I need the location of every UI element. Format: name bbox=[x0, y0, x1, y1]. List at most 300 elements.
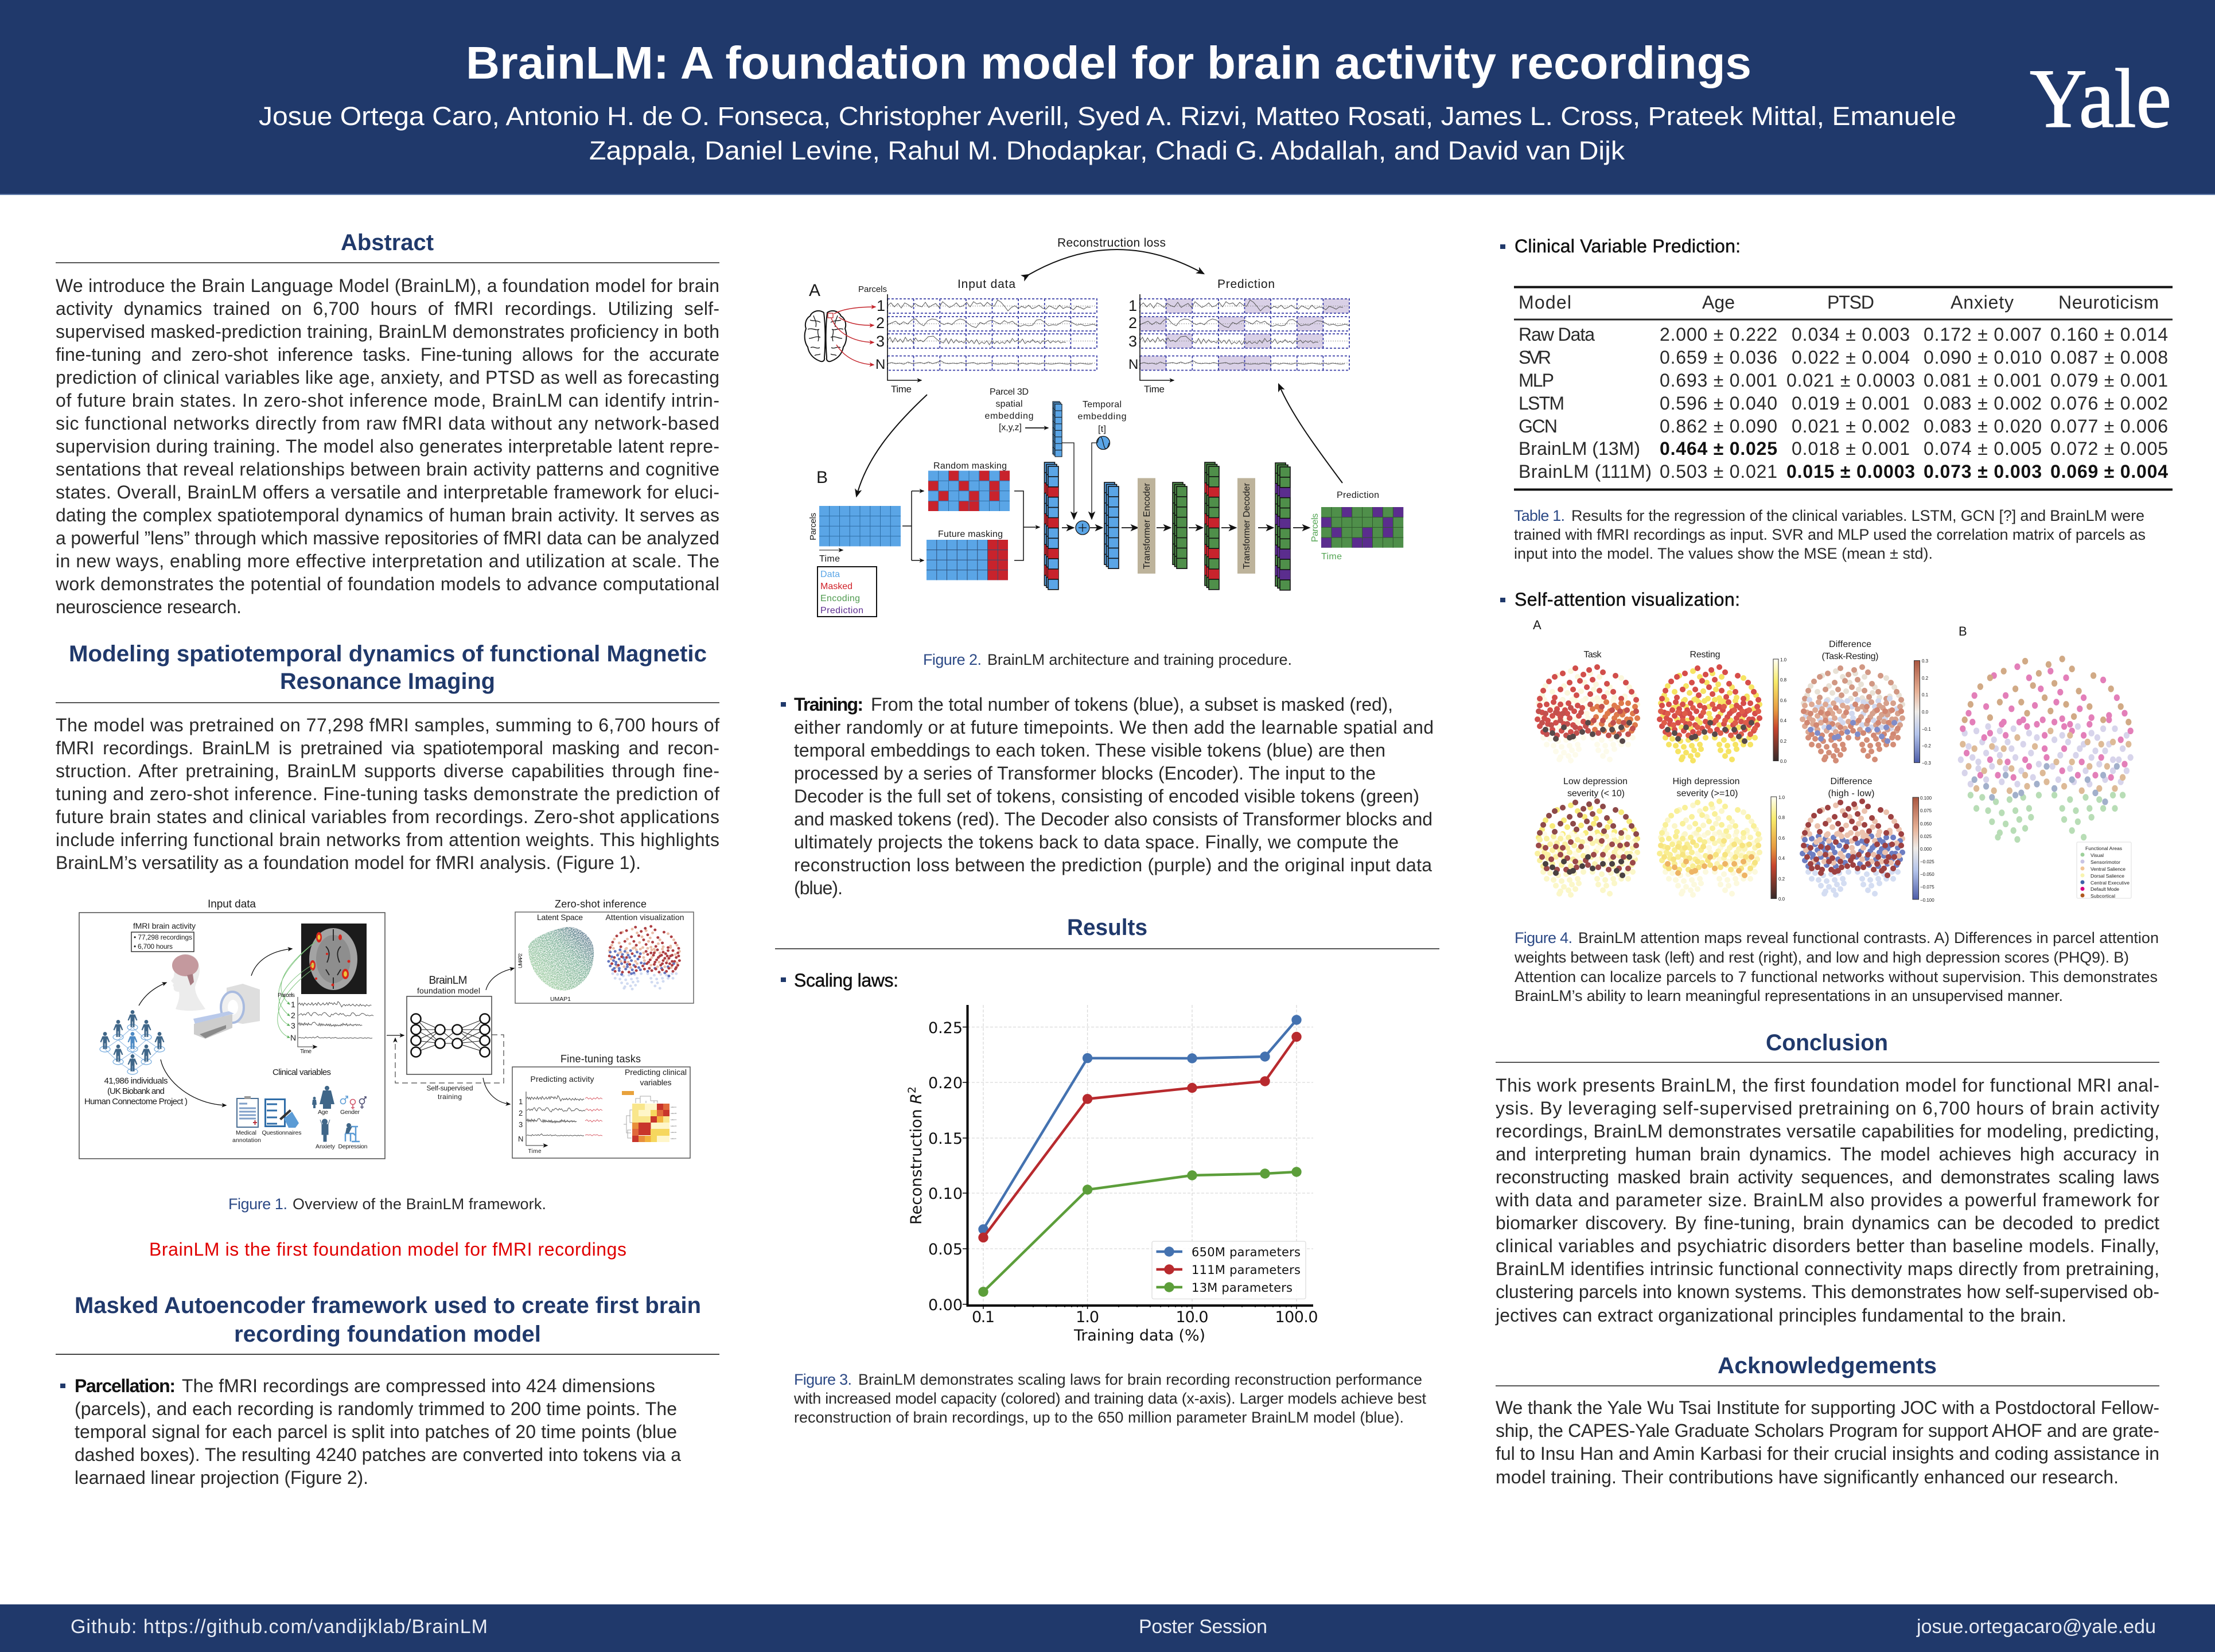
parcellation bullet: learnaed linear projection (Figure 2). bbox=[75, 1467, 368, 1488]
table header: Age bbox=[1702, 292, 1735, 313]
title: BrainLM: A foundation model for brain activity recordings bbox=[466, 37, 1751, 88]
training bullet: and masked tokens (red). The Decoder also consists of Transformer blocks and bbox=[794, 809, 1432, 829]
brain plot: task bbox=[1537, 667, 1637, 761]
colorbar: depression bbox=[1771, 795, 1785, 902]
heading: masked autoencoder bbox=[75, 1293, 701, 1347]
embeddings: [x,y,z] bbox=[999, 423, 1022, 433]
table rows: 0.077 ± 0.006 bbox=[2050, 416, 2168, 437]
modeling text: include inferring functional brain networks from attention weights. This highlights bbox=[56, 829, 719, 850]
plot titles: Difference bbox=[1829, 640, 1871, 649]
clustered heatmap: Label B bbox=[671, 1112, 676, 1115]
colorbar: task and resting: 1.0 bbox=[1780, 657, 1787, 663]
abstract text: We introduce the Brain Language Model (BrainLM), a foundation model for brain bbox=[56, 275, 719, 296]
parcellation bullet bbox=[60, 1376, 681, 1488]
table rows: SVR bbox=[1519, 347, 1551, 368]
modeling text: struction. After pretraining, BrainLM supports diverse capabilities through fine- bbox=[56, 761, 719, 781]
BrainLM foundation model: training bbox=[438, 1093, 462, 1101]
parcellation bullet: dashed boxes). The resulting 4240 patches are converted into tokens via a bbox=[75, 1444, 681, 1465]
axes bbox=[906, 1005, 1318, 1345]
modeling text: The model was pretrained on 77,298 fMRI samples, summing to 6,700 hours of bbox=[56, 715, 719, 735]
clinical variables bbox=[232, 1067, 368, 1150]
figure 4 caption: Figure 4. bbox=[1515, 929, 1572, 946]
heading: abstract: Abstract bbox=[341, 230, 434, 255]
zero-shot inference panel: UMAP1 bbox=[550, 996, 571, 1003]
table rows: 0.019 ± 0.001 bbox=[1792, 393, 1910, 414]
acknowledgements text: model training. Their contributions have significantly enhanced our research. bbox=[1496, 1467, 2119, 1487]
table rows: 0.659 ± 0.036 bbox=[1660, 347, 1777, 368]
panel A: 3 bbox=[876, 333, 885, 350]
figure 3 caption: with increased model capacity (colored) and training data (x-axis). Larger models achieve best bbox=[793, 1390, 1426, 1407]
table rows: 0.073 ± 0.003 bbox=[1924, 461, 2042, 482]
table rows: BrainLM (13M) bbox=[1519, 438, 1640, 459]
table rows: 0.083 ± 0.002 bbox=[1924, 393, 2042, 414]
axes: 2 bbox=[906, 1086, 918, 1093]
modeling text: tuning and zero-shot inference. Fine-tuning tasks demonstrate the prediction of bbox=[56, 784, 719, 804]
axes: Training data (%) bbox=[1073, 1327, 1205, 1345]
icon: age gender anxiety depression bbox=[312, 1086, 366, 1141]
modeling text: BrainLM’s versatility as a foundation model for fMRI analysis. (Figure 1). bbox=[56, 852, 641, 873]
clinical variables: Anxiety bbox=[316, 1143, 336, 1150]
table 1 caption: Results for the regression of the clinical variables. LSTM, GCN [?] and BrainLM were bbox=[1571, 507, 2144, 524]
conclusion text: BrainLM identifies intrinsic functional connectivity maps directly from pretraining, bbox=[1496, 1259, 2159, 1279]
colorbar: depression: 0.8 bbox=[1778, 815, 1785, 820]
clustered heatmap bbox=[622, 1091, 677, 1142]
random masking grid bbox=[928, 461, 1010, 511]
fine-tuning tasks panel: Predicting activity bbox=[530, 1074, 594, 1084]
prediction signals: 2 bbox=[1128, 314, 1137, 332]
series: 650M bbox=[978, 1015, 1302, 1234]
clinical variables: Depression bbox=[338, 1143, 368, 1150]
abstract text: dating the complex spatiotemporal dynamics of human brain activity. It serves as bbox=[56, 505, 719, 525]
footer bar: Github: https://github.com/vandijklab/BrainLM bbox=[71, 1616, 488, 1638]
transformer encoder: Transformer Encoder bbox=[1142, 482, 1152, 569]
participants label: Human Connectome Project ) bbox=[84, 1097, 188, 1106]
BrainLM foundation model bbox=[387, 968, 514, 1104]
colorbar: high minus low: 0.075 bbox=[1920, 808, 1932, 813]
legend: token colors bbox=[818, 567, 877, 617]
footer bar: Poster Session bbox=[1139, 1616, 1267, 1638]
panel A: 2 bbox=[876, 314, 885, 332]
prediction signals bbox=[1128, 294, 1349, 395]
prediction signals: N bbox=[1128, 357, 1138, 372]
table 1 caption: Table 1. bbox=[1514, 507, 1565, 524]
authors: Josue Ortega Caro, Antonio H. de O. Fonseca, Christopher Averill, Syed A. Rizvi, Matteo Rosati, James L. Cross, Prateek Mittal, Emanuele bbox=[259, 102, 1956, 131]
plot titles: (Task-Resting) bbox=[1822, 652, 1878, 661]
table rows: 0.464 ± 0.025 bbox=[1660, 438, 1777, 459]
icon: medical annotation bbox=[237, 1096, 258, 1127]
transformer decoder bbox=[1237, 478, 1255, 574]
icon: participant network bbox=[100, 1010, 165, 1074]
footer bar bbox=[0, 1604, 2215, 1652]
prediction grid: Prediction bbox=[1337, 490, 1379, 500]
clinical variables: Medical bbox=[236, 1129, 256, 1136]
figure 4 caption: weights between task (left) and rest (right), and low and high depression scores (PHQ9). B) bbox=[1514, 949, 2129, 966]
colorbar: task minus resting bbox=[1914, 659, 1931, 766]
clinical variable prediction label: Clinical Variable Prediction: bbox=[1515, 236, 1741, 256]
clinical variables: Age bbox=[318, 1109, 328, 1116]
acknowledgements text: ship, the CAPES-Yale Graduate Scholars Program for support AHOF and are grate- bbox=[1496, 1420, 2159, 1441]
modeling text: fMRI recordings. BrainLM is pretrained via spatiotemporal masking and recon- bbox=[56, 738, 719, 758]
colorbar: high minus low: −0.100 bbox=[1920, 898, 1934, 903]
legend: functional areas bbox=[2077, 842, 2131, 899]
legend: functional areas: Visual bbox=[2091, 852, 2104, 858]
figure 1 caption: Overview of the BrainLM framework. bbox=[293, 1195, 546, 1213]
table rows: 0.503 ± 0.021 bbox=[1660, 461, 1777, 482]
abstract text: states. Overall, BrainLM offers a versatile and interpretable framework for eluci- bbox=[56, 482, 719, 502]
table rows: 0.018 ± 0.001 bbox=[1792, 438, 1910, 459]
legend: token colors: Masked bbox=[820, 582, 852, 591]
figure 3 caption: Figure 3. bbox=[794, 1371, 852, 1388]
chart legend: 13M parameters bbox=[1192, 1281, 1293, 1295]
brain plot: resting bbox=[1660, 667, 1759, 761]
abstract text: fine-tuning and zero-shot inference tasks. Fine-tuning allows for the accurate bbox=[56, 344, 719, 365]
table rows: 0.090 ± 0.010 bbox=[1924, 347, 2042, 368]
zero-shot inference panel bbox=[515, 898, 694, 1003]
table rows: 0.021 ± 0.002 bbox=[1792, 416, 1910, 437]
conclusion text: and interpreting human brain dynamics. The model achieves high accuracy in bbox=[1496, 1144, 2159, 1164]
abstract text: prediction of clinical variables like age, anxiety, and PTSD as well as forecasting bbox=[56, 367, 719, 388]
table 1 caption bbox=[1514, 507, 2146, 562]
acknowledgements text: ful to Insu Han and Amin Karbasi for their crucial insights and coding assistance in bbox=[1496, 1443, 2159, 1464]
legend: functional areas: Central Executive bbox=[2091, 880, 2130, 886]
axes: 0.10 bbox=[928, 1185, 963, 1203]
table rows: 0.034 ± 0.003 bbox=[1792, 324, 1910, 345]
panel: conclusion bbox=[1495, 1030, 2159, 1326]
table rows: 0.160 ± 0.014 bbox=[2050, 324, 2168, 345]
table rows: MLP bbox=[1519, 370, 1554, 391]
clustered heatmap: Label F bbox=[671, 1137, 676, 1140]
clustered heatmap: Label A bbox=[671, 1106, 676, 1108]
panel A: A bbox=[809, 281, 820, 300]
abstract text: neuroscience research. bbox=[56, 597, 242, 617]
embeddings: [t] bbox=[1098, 424, 1106, 434]
modeling text bbox=[56, 715, 719, 873]
add embeddings bbox=[1062, 521, 1102, 535]
colorbar: high minus low bbox=[1913, 796, 1934, 903]
axes: Reconstruction R bbox=[908, 1093, 925, 1225]
colorbar: high minus low: 0.050 bbox=[1920, 821, 1932, 827]
table rows: 0.076 ± 0.002 bbox=[2050, 393, 2168, 414]
panel A: 1 bbox=[877, 297, 885, 314]
zero-shot inference panel: Zero-shot inference bbox=[555, 898, 647, 910]
heading: conclusion: Conclusion bbox=[1766, 1030, 1888, 1055]
axes: 0.15 bbox=[928, 1130, 963, 1148]
abstract text bbox=[55, 275, 719, 617]
parcel time series: 1 bbox=[291, 1000, 295, 1009]
table 1 caption: input into the model. The values show the MSE (mean ± std). bbox=[1514, 545, 1933, 562]
clinical variables: Gender bbox=[340, 1109, 360, 1116]
prediction grid: Parcels bbox=[1310, 513, 1320, 542]
figure 4: attention maps: A bbox=[1533, 618, 1541, 632]
colorbar: high minus low: −0.025 bbox=[1920, 859, 1934, 864]
fine-tuning tasks panel: Predicting clinical bbox=[625, 1067, 687, 1077]
authors bbox=[259, 102, 1956, 165]
plot titles: severity (>=10) bbox=[1676, 789, 1738, 798]
input data panel: Input data bbox=[208, 898, 256, 910]
clustered heatmap: Label E bbox=[671, 1131, 676, 1133]
axes: 0.00 bbox=[928, 1296, 963, 1314]
colorbar: high minus low: 0.000 bbox=[1920, 847, 1932, 852]
embeddings: embedding bbox=[984, 411, 1034, 421]
panel B: B bbox=[816, 468, 828, 487]
figure 4: attention maps bbox=[1533, 618, 2131, 903]
table rows: 2.000 ± 0.222 bbox=[1660, 324, 1777, 345]
prediction signals: 3 bbox=[1128, 333, 1137, 350]
panel: acknowledgements bbox=[1496, 1353, 2159, 1487]
axes: 10.0 bbox=[1176, 1308, 1208, 1326]
transformer decoder: Transformer Decoder bbox=[1242, 482, 1252, 569]
heading: masked autoencoder: Masked Autoencoder framework used to create first brain bbox=[75, 1293, 701, 1318]
clustered heatmap: Label D bbox=[671, 1125, 677, 1127]
heading: modeling: Resonance Imaging bbox=[280, 669, 495, 694]
fine-tuning tasks panel bbox=[512, 1053, 690, 1158]
fine-tuning tasks panel: variables bbox=[640, 1078, 671, 1087]
plot titles: severity (< 10) bbox=[1567, 789, 1625, 798]
heading: modeling bbox=[69, 641, 707, 694]
figure 1: overview of the BrainLM framework bbox=[79, 898, 694, 1159]
embeddings: embedding bbox=[1077, 412, 1127, 422]
table rows: 0.596 ± 0.040 bbox=[1660, 393, 1777, 414]
parcellation bullet: temporal signal for each parcel is split into patches of 20 time points (blue bbox=[75, 1421, 677, 1442]
table header: Model bbox=[1519, 292, 1571, 313]
axes: 0.05 bbox=[928, 1241, 963, 1259]
colorbar: high minus low: 0.025 bbox=[1920, 834, 1932, 839]
brain plot: high minus low bbox=[1803, 801, 1902, 895]
panel: masked autoencoder framework bbox=[56, 1293, 719, 1488]
axes: 0.20 bbox=[928, 1074, 963, 1092]
table header: Anxiety bbox=[1951, 292, 2014, 313]
fine-tuning tasks panel: N bbox=[518, 1135, 523, 1143]
BrainLM foundation model: foundation model bbox=[417, 986, 480, 995]
colorbar: depression: 1.0 bbox=[1778, 795, 1785, 800]
table header: PTSD bbox=[1827, 292, 1874, 313]
parcel time series: 2 bbox=[291, 1011, 295, 1020]
colorbar: task minus resting: 0.2 bbox=[1922, 676, 1929, 681]
colorbar: task and resting: 0.8 bbox=[1780, 677, 1787, 683]
axes: 1.0 bbox=[1076, 1308, 1099, 1326]
authors: Zappala, Daniel Levine, Rahul M. Dhodapkar, Chadi G. Abdallah, and David van Dijk bbox=[589, 136, 1625, 165]
conclusion text: ysis. By leveraging self-supervised pretraining on 6,700 hours of brain activity bbox=[1496, 1098, 2159, 1119]
green parcel links bbox=[278, 941, 317, 1038]
red parcel arrows bbox=[831, 307, 875, 365]
abstract text: work demonstrates the potential of foundation models to advance computational bbox=[55, 574, 719, 594]
heading: modeling: Modeling spatiotemporal dynamics of functional Magnetic bbox=[69, 641, 707, 667]
input token grid: Time bbox=[819, 554, 840, 564]
table rows: 0.172 ± 0.007 bbox=[1924, 324, 2042, 345]
panel: abstract bbox=[55, 230, 719, 617]
panel A: Parcels bbox=[858, 285, 887, 294]
table rows: 0.069 ± 0.004 bbox=[2050, 461, 2168, 482]
abstract text: supervised masked-prediction training, BrainLM demonstrates proficiency in both bbox=[56, 321, 719, 342]
figure 4 caption: Attention can localize parcels to 7 functional networks without supervision. This demonstrates bbox=[1515, 968, 2158, 985]
BrainLM foundation model: BrainLM bbox=[429, 975, 467, 987]
colorbar: high minus low: −0.050 bbox=[1920, 872, 1934, 877]
heading: acknowledgements: Acknowledgements bbox=[1718, 1353, 1937, 1378]
participants label: 41,986 individuals bbox=[104, 1076, 168, 1086]
token stack: masked bbox=[1044, 462, 1058, 590]
legend: functional areas: Ventral Salience bbox=[2091, 866, 2126, 872]
table rows: GCN bbox=[1519, 416, 1558, 437]
colorbar: task minus resting: 0.0 bbox=[1922, 710, 1929, 715]
table header: Neuroticism bbox=[2058, 292, 2159, 313]
legend: functional areas: Sensorimotor bbox=[2091, 859, 2120, 865]
parcellation bullet: The fMRI recordings are compressed into 424 dimensions bbox=[182, 1376, 655, 1396]
BrainLM foundation model: Self-supervised bbox=[427, 1084, 473, 1092]
legend: functional areas: Functional Areas bbox=[2085, 846, 2122, 851]
panel: modeling spatiotemporal dynamics bbox=[56, 641, 719, 873]
colorbar: depression: 0.4 bbox=[1778, 856, 1785, 861]
abstract text: in new ways, enabling more effective interpretation and utilization at scale. The bbox=[56, 551, 719, 571]
abstract text: supervision during training. The model also generates interpretable latent repre- bbox=[56, 436, 719, 457]
parcellation bullet: Parcellation: bbox=[75, 1376, 176, 1396]
fine-tuning tasks panel: 3 bbox=[519, 1120, 523, 1129]
clinical variables: annotation bbox=[232, 1137, 261, 1144]
acknowledgements text bbox=[1496, 1397, 2159, 1487]
colorbar: high minus low: 0.100 bbox=[1920, 796, 1932, 801]
colorbar: task and resting bbox=[1773, 657, 1787, 764]
table rows: 0.862 ± 0.090 bbox=[1660, 416, 1777, 437]
plot titles: High depression bbox=[1673, 777, 1739, 786]
legend: functional areas: Dorsal Salience bbox=[2091, 873, 2124, 879]
panel A bbox=[805, 278, 1349, 395]
axes: 0.1 bbox=[972, 1308, 995, 1326]
chart: reconstruction vs training data bbox=[906, 1005, 1318, 1345]
figure 1 caption: Figure 1. bbox=[228, 1195, 287, 1213]
training bullet: (blue). bbox=[794, 878, 843, 898]
chart legend: 650M parameters bbox=[1192, 1245, 1301, 1259]
connecting arrows bbox=[857, 384, 1342, 496]
figure 4 caption: BrainLM attention maps reveal functional contrasts. A) Differences in parcel attention bbox=[1578, 929, 2159, 946]
future masking grid bbox=[927, 529, 1008, 580]
transformer encoder bbox=[1138, 478, 1155, 574]
input data panel bbox=[79, 898, 385, 1159]
legend: functional areas: Subcortical bbox=[2091, 893, 2115, 899]
icon: questionnaires bbox=[264, 1098, 299, 1128]
panel A: Time bbox=[891, 384, 912, 395]
icon: head with brain bbox=[171, 954, 205, 1011]
callout: first foundation model: BrainLM is the first foundation model for fMRI recordings bbox=[149, 1239, 626, 1260]
figure 2: BrainLM architecture bbox=[805, 236, 1403, 617]
colorbar: task minus resting: −0.3 bbox=[1922, 761, 1931, 766]
training bullet: either randomly or at future timepoints. We then add the learnable spatial and bbox=[794, 717, 1434, 738]
brain plot: high depression bbox=[1660, 801, 1759, 895]
footer bar: josue.ortegacaro@yale.edu bbox=[1916, 1616, 2156, 1638]
embeddings: Temporal bbox=[1083, 400, 1122, 410]
training bullet: Decoder is the full set of tokens, consisting of encoded visible tokens (green) bbox=[794, 786, 1419, 806]
input signals bbox=[887, 299, 1097, 371]
reconstruction loss arc bbox=[1029, 236, 1204, 275]
table 1 caption: trained with fMRI recordings as input. SVR and MLP used the correlation matrix of parcels as bbox=[1514, 526, 2146, 543]
attention scatter bbox=[609, 926, 679, 989]
series: 13M bbox=[978, 1167, 1302, 1297]
zero-shot inference panel: Latent Space bbox=[537, 913, 583, 922]
chart legend: 111M parameters bbox=[1192, 1263, 1301, 1277]
table rows: BrainLM (111M) bbox=[1519, 461, 1652, 482]
training bullet: From the total number of tokens (blue), a subset is masked (red), bbox=[871, 694, 1393, 715]
conclusion text: with data and parameter size. BrainLM also provides a powerful framework for bbox=[1495, 1190, 2159, 1210]
table rows: LSTM bbox=[1519, 393, 1564, 414]
zero-shot inference panel: Attention visualization bbox=[606, 913, 684, 922]
table header bbox=[1519, 292, 2159, 313]
input token grid: Parcels bbox=[808, 513, 818, 540]
fine-tuning tasks panel: Fine-tuning tasks bbox=[560, 1053, 641, 1065]
colorbar: task minus resting: 0.3 bbox=[1922, 659, 1929, 664]
training bullet: Training: bbox=[794, 694, 863, 715]
conclusion text: recordings, BrainLM demonstrates versatile capabilities for modeling, predicting, bbox=[1496, 1121, 2159, 1141]
abstract text: sentations that reveal relationships between brain activity patterns and cognitive bbox=[56, 459, 719, 480]
abstract text: a powerful ”lens” through which massive repositories of fMRI data can be analyzed bbox=[56, 528, 719, 548]
conclusion text bbox=[1495, 1075, 2159, 1326]
colorbar: task minus resting: −0.2 bbox=[1922, 743, 1931, 749]
prediction grid bbox=[1310, 490, 1403, 562]
prediction signals: Time bbox=[1144, 384, 1165, 395]
brain plot: low depression bbox=[1537, 801, 1637, 895]
training bullet: reconstruction loss between the prediction (purple) and the original input data bbox=[794, 855, 1432, 875]
conclusion text: jectives can extract organizational principles fundamental to the brain. bbox=[1495, 1305, 2066, 1326]
random masking grid: Random masking bbox=[933, 461, 1007, 471]
table rows: Raw Data bbox=[1519, 324, 1595, 345]
token stack: prediction bbox=[1275, 463, 1290, 590]
legend: functional areas: Default Mode bbox=[2091, 886, 2119, 892]
colorbar: depression: 0.6 bbox=[1778, 836, 1785, 841]
fine-tuning tasks panel: 2 bbox=[519, 1109, 523, 1117]
table rows: 0.072 ± 0.005 bbox=[2050, 438, 2168, 459]
clustered heatmap: Label C bbox=[671, 1119, 677, 1121]
panel A: Prediction bbox=[1217, 278, 1275, 291]
axes: 0.25 bbox=[928, 1019, 963, 1037]
brain plot: task minus resting bbox=[1803, 667, 1902, 761]
parcel time series: N bbox=[290, 1033, 296, 1042]
axes: 100.0 bbox=[1275, 1308, 1318, 1326]
heading: masked autoencoder: recording foundation model bbox=[234, 1322, 541, 1347]
legend: token colors: Prediction bbox=[820, 606, 863, 615]
input data panel: • 6,700 hours bbox=[134, 942, 173, 950]
future masking grid: Future masking bbox=[938, 529, 1003, 539]
participants label: (UK Biobank and bbox=[107, 1086, 165, 1096]
brain plot: functional areas bbox=[1961, 659, 2131, 839]
legend: token colors: Encoding bbox=[820, 594, 860, 603]
embeddings bbox=[984, 387, 1127, 519]
heading: results: Results bbox=[1067, 915, 1147, 940]
fine-tuning tasks panel: Time bbox=[528, 1148, 542, 1155]
conclusion text: clinical variables and psychiatric disorders better than baseline models. Finally, bbox=[1496, 1236, 2159, 1256]
figure 4 caption bbox=[1514, 929, 2159, 1004]
parcel time series: 3 bbox=[291, 1021, 295, 1030]
modeling text: future brain states and clinical variables from recordings. Zero-shot applications bbox=[56, 806, 719, 827]
conclusion text: biomarker discovery. By fine-tuning, brain dynamics can be decoded to predict bbox=[1496, 1213, 2159, 1233]
abstract text: of future brain states. In zero-shot inference mode, BrainLM can identify intrin- bbox=[56, 390, 719, 411]
self-attention visualization label: Self-attention visualization: bbox=[1515, 589, 1740, 610]
figure 3 caption: BrainLM demonstrates scaling laws for brain recording reconstruction performance bbox=[858, 1371, 1422, 1388]
clinical variables: Clinical variables bbox=[273, 1067, 331, 1077]
token stack: encoded bbox=[1173, 482, 1187, 568]
table rows: 0.074 ± 0.005 bbox=[1924, 438, 2042, 459]
colorbar: task and resting: 0.6 bbox=[1780, 698, 1787, 703]
colorbar: depression: 0.2 bbox=[1778, 876, 1785, 882]
arrows bbox=[139, 983, 166, 1006]
table rows: 0.087 ± 0.008 bbox=[2050, 347, 2168, 368]
table rows: 0.079 ± 0.001 bbox=[2050, 370, 2168, 391]
input token grid bbox=[808, 506, 901, 564]
UMAP scatter bbox=[528, 927, 594, 991]
panel A: N bbox=[875, 357, 885, 372]
plot titles: Task bbox=[1583, 650, 1602, 660]
chart legend bbox=[1152, 1241, 1306, 1299]
parcellation bullet: (parcels), and each recording is randomly trimmed to 200 time points. The bbox=[75, 1398, 677, 1419]
embeddings: Parcel 3D bbox=[990, 387, 1029, 397]
acknowledgements text: We thank the Yale Wu Tsai Institute for supporting JOC with a Postdoctoral Fellow- bbox=[1496, 1397, 2159, 1418]
scaling laws label: Scaling laws: bbox=[794, 970, 898, 991]
